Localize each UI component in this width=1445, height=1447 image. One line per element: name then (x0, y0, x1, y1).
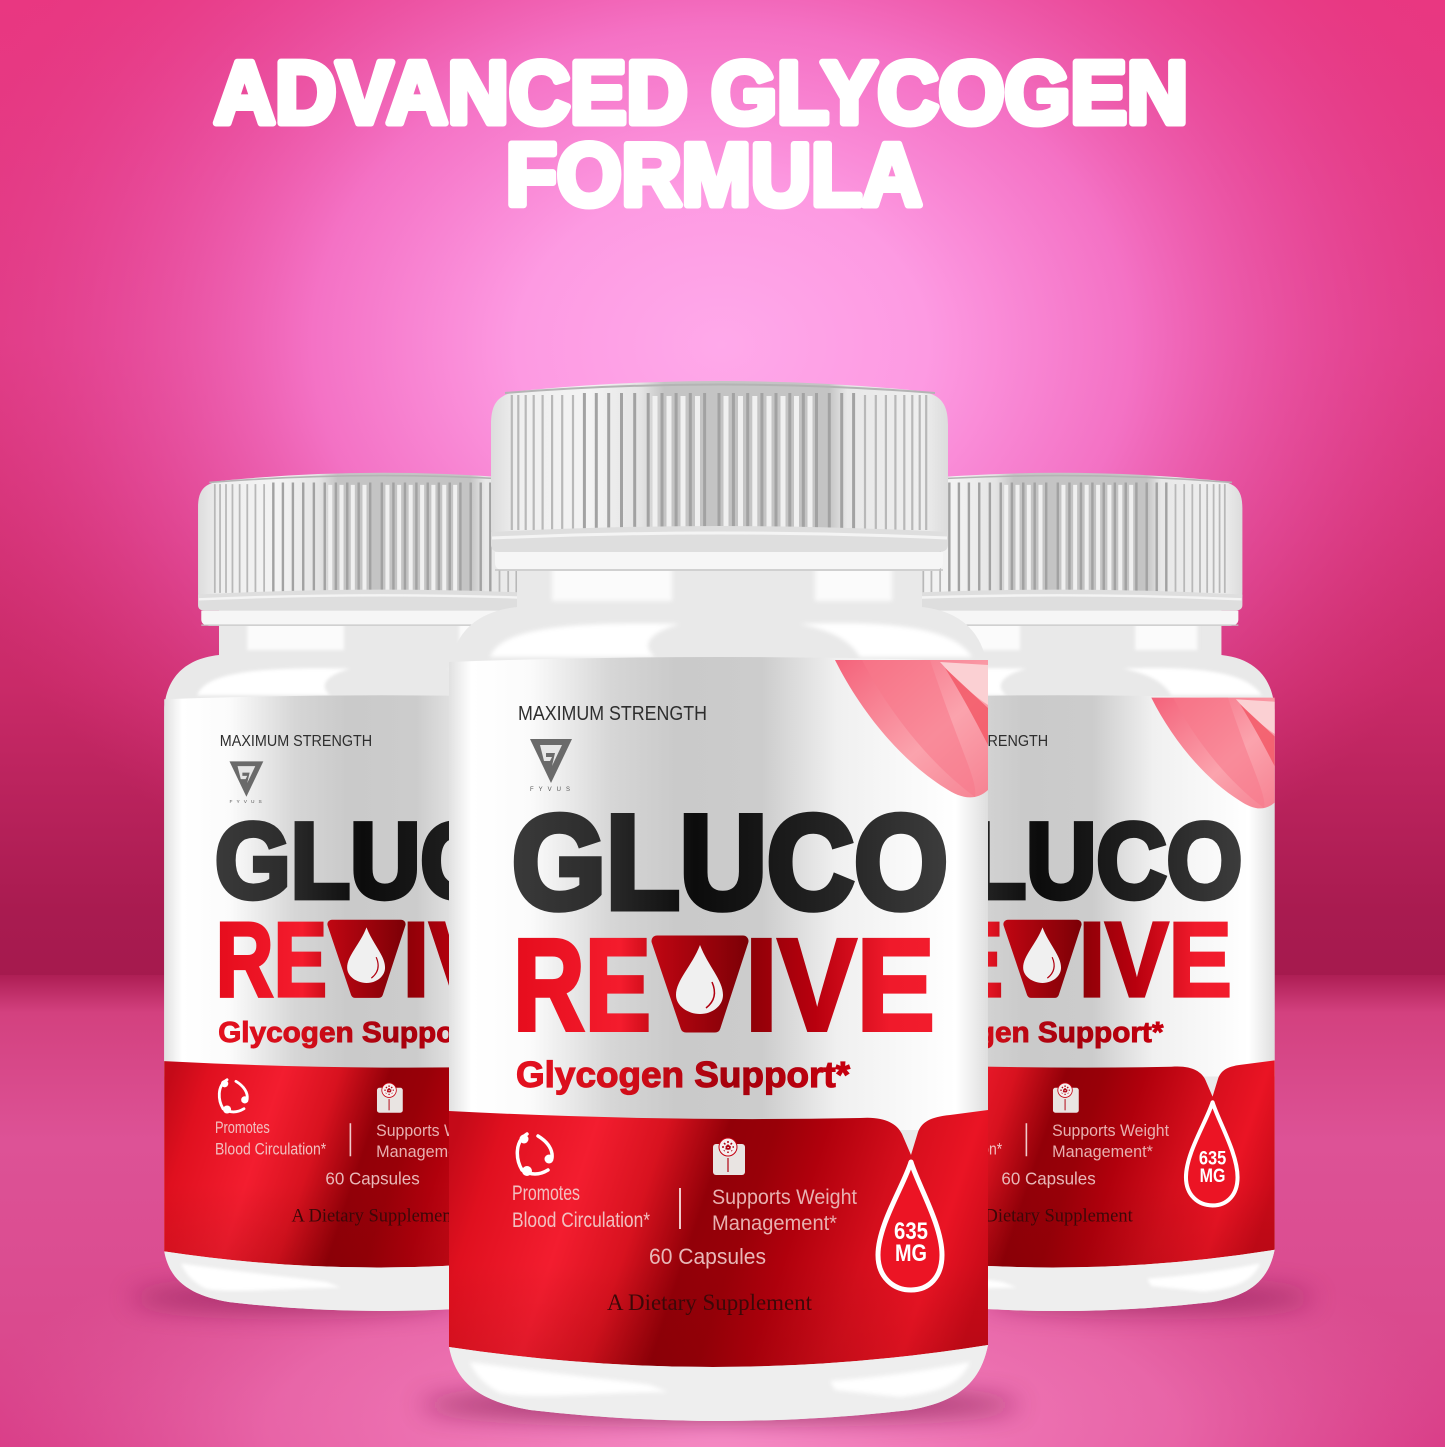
label text: left bottle: 60 Capsules (325, 1168, 420, 1188)
label text: right bottle: Management* (1052, 1142, 1153, 1161)
benefit: circulation (512, 1182, 650, 1232)
label text: left bottle: FYVUS (229, 799, 266, 805)
label text: right bottle: RE (892, 901, 1003, 1019)
title (214, 43, 1188, 224)
label text: right bottle (891, 732, 1242, 1227)
label text: left bottle: Management* (376, 1142, 477, 1161)
centre bottle (449, 381, 988, 1421)
benefit: weight: Supports Weight (712, 1186, 857, 1209)
label text: right bottle: Glycogen Support* (894, 1017, 1164, 1049)
shadow: left bottle (130, 1285, 460, 1311)
dietary supplement line: A Dietary Supplement (607, 1290, 813, 1315)
label text: left bottle: A Dietary Supplement (292, 1206, 458, 1227)
floor (0, 975, 1445, 1447)
label text: left bottle: MG (524, 1165, 549, 1187)
benefit: circulation: Promotes (512, 1182, 580, 1205)
dosage: MG (895, 1240, 927, 1267)
label text: right bottle: A Dietary Supplement (968, 1206, 1134, 1227)
product name: REVIVE start: RE (513, 911, 651, 1058)
label text: left bottle: Promotes (215, 1118, 270, 1137)
label text: right bottle: 635 (1199, 1147, 1226, 1169)
subtitle: Glycogen Support* (516, 1054, 850, 1095)
benefit: weight (712, 1186, 857, 1235)
shadow: right bottle (985, 1285, 1315, 1311)
label text: left bottle: 635 (523, 1147, 550, 1169)
right bottle (840, 473, 1275, 1311)
label text: right bottle: MG (1200, 1165, 1225, 1187)
label text: left bottle: Supports Weight (376, 1121, 493, 1140)
product name: GLUCO: GLUCO (512, 789, 948, 937)
label text: right bottle: IVE (1079, 901, 1232, 1019)
label text: right bottle: GLUCO (891, 801, 1242, 921)
dosage (894, 1218, 928, 1267)
product name: REVIVE end: IVE (745, 911, 935, 1058)
left bottle (164, 473, 599, 1311)
capsule count: 60 Capsules (649, 1244, 766, 1269)
floor glow (0, 1150, 1445, 1447)
label text: left bottle (215, 732, 566, 1227)
label text: right bottle: Supports Weight (1052, 1121, 1169, 1140)
benefit: weight: Management* (712, 1212, 837, 1235)
label text: right bottle: Blood Circulation* (891, 1140, 1003, 1159)
label text: left bottle: IVE (403, 901, 556, 1019)
title: FORMULA (506, 125, 922, 224)
label text: right bottle: 60 Capsules (1001, 1168, 1096, 1188)
label text: left bottle: MAXIMUM STRENGTH (220, 732, 372, 750)
shadow: centre bottle (420, 1391, 1020, 1419)
dosage: 635 (894, 1218, 928, 1245)
label text: left bottle: RE (216, 901, 327, 1019)
maximum strength: MAXIMUM STRENGTH (518, 703, 707, 725)
benefit: circulation: Blood Circulation* (512, 1209, 650, 1232)
background glow (0, 0, 1445, 978)
label text: right bottle: MAXIMUM STRENGTH (896, 732, 1048, 750)
label text: left bottle: GLUCO (215, 801, 566, 921)
title: ADVANCED GLYCOGEN (214, 43, 1188, 142)
background wall (0, 0, 1445, 978)
label text: left bottle: Blood Circulation* (215, 1140, 327, 1159)
label text: left bottle: Glycogen Support* (218, 1017, 488, 1049)
brand name: FYVUS (530, 787, 575, 793)
label text: centre bottle (512, 703, 948, 1315)
